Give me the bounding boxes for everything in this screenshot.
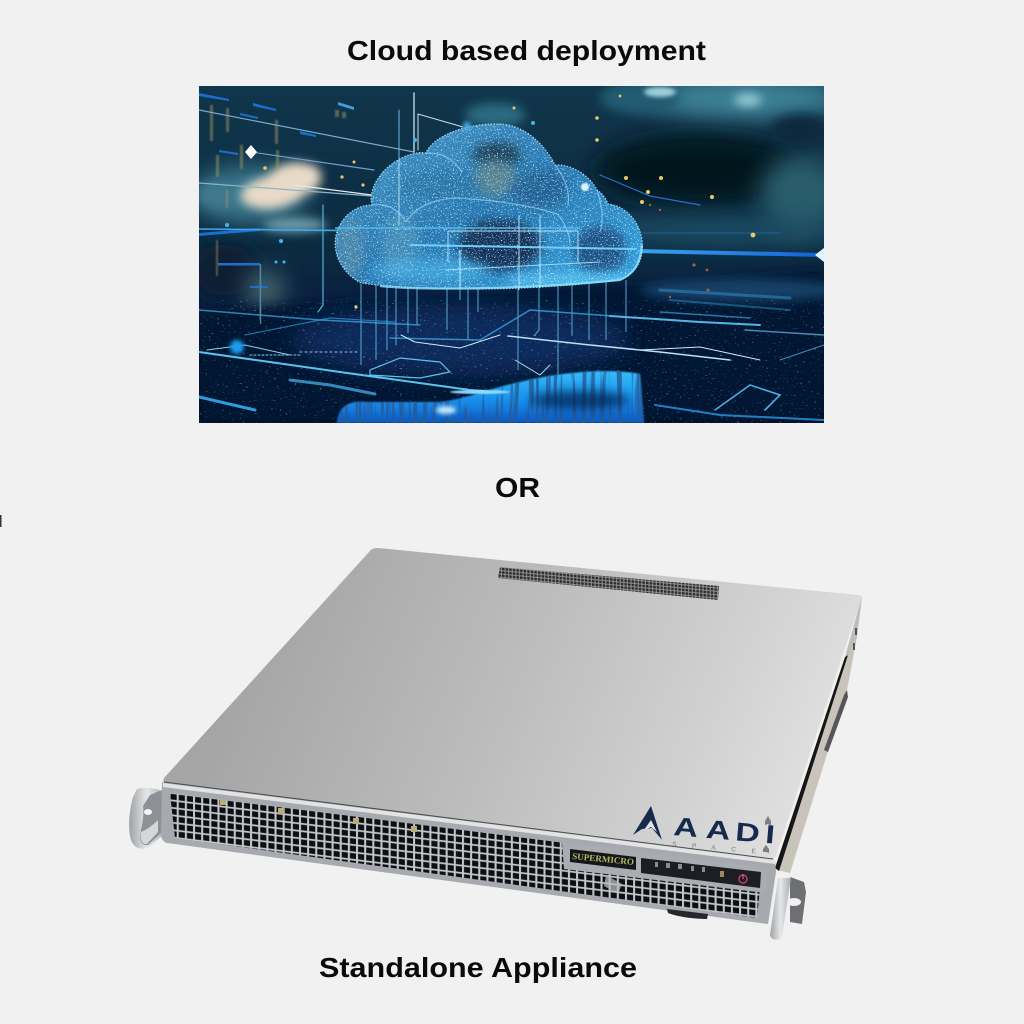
logo: AADI SPACE: AADI: [672, 813, 776, 850]
white diamond marker: [245, 145, 257, 159]
lines crossing cloud: [335, 160, 636, 290]
orange sparks: [649, 204, 710, 298]
golden particles: [263, 95, 755, 309]
heading: standalone appliance: Standalone Appliance: [319, 952, 637, 983]
cloud speckle: [330, 120, 645, 292]
top cover: [163, 548, 861, 861]
holographic cloud: [330, 120, 645, 292]
logo lower accent: [763, 845, 769, 853]
image: digital cloud over circuit board: [191, 76, 845, 423]
left rack handle: [129, 788, 165, 849]
SUPERMICRO badge: SUPERMICRO: [572, 851, 634, 867]
edge tick mark: [0, 515, 2, 527]
cloud bright edge: [335, 124, 642, 289]
reflected cloud glow: [337, 370, 647, 423]
circuit traces: [199, 290, 824, 420]
storm clouds: [191, 76, 845, 310]
logo: AADI SPACE: [633, 806, 776, 855]
front ventilation grid: [170, 793, 762, 918]
small gold fasteners: [220, 799, 417, 832]
cyan particles: [225, 121, 535, 264]
logo accent: [765, 816, 771, 826]
logo: AADI SPACE: SPACE: [672, 841, 757, 855]
lobe contours: [372, 153, 602, 245]
underside foot: [667, 909, 708, 919]
control area plate: [562, 842, 768, 893]
right side panel: [775, 596, 862, 873]
amber vertical blurred lights: [210, 105, 346, 276]
server appliance: [129, 548, 862, 940]
dark floor: [199, 270, 824, 423]
horizontal light beam: [636, 249, 824, 257]
logo mark: [633, 806, 662, 840]
fan highlight: [604, 875, 622, 894]
night sky background: [199, 86, 824, 423]
status panel: [641, 858, 761, 888]
blue node glow: [230, 340, 244, 354]
right rack handle: [770, 877, 806, 940]
label: OR: OR: [495, 472, 540, 503]
circuit noise: [199, 300, 824, 423]
rain lines under cloud: [361, 280, 626, 380]
front panel: [161, 782, 776, 924]
power button: [739, 875, 747, 883]
heading: cloud based deployment: Cloud based deployment: [347, 35, 706, 66]
cloud inner shadows: [336, 220, 364, 280]
left data strips: [199, 93, 354, 324]
data lines: [199, 93, 780, 320]
rear vent: [498, 567, 719, 600]
